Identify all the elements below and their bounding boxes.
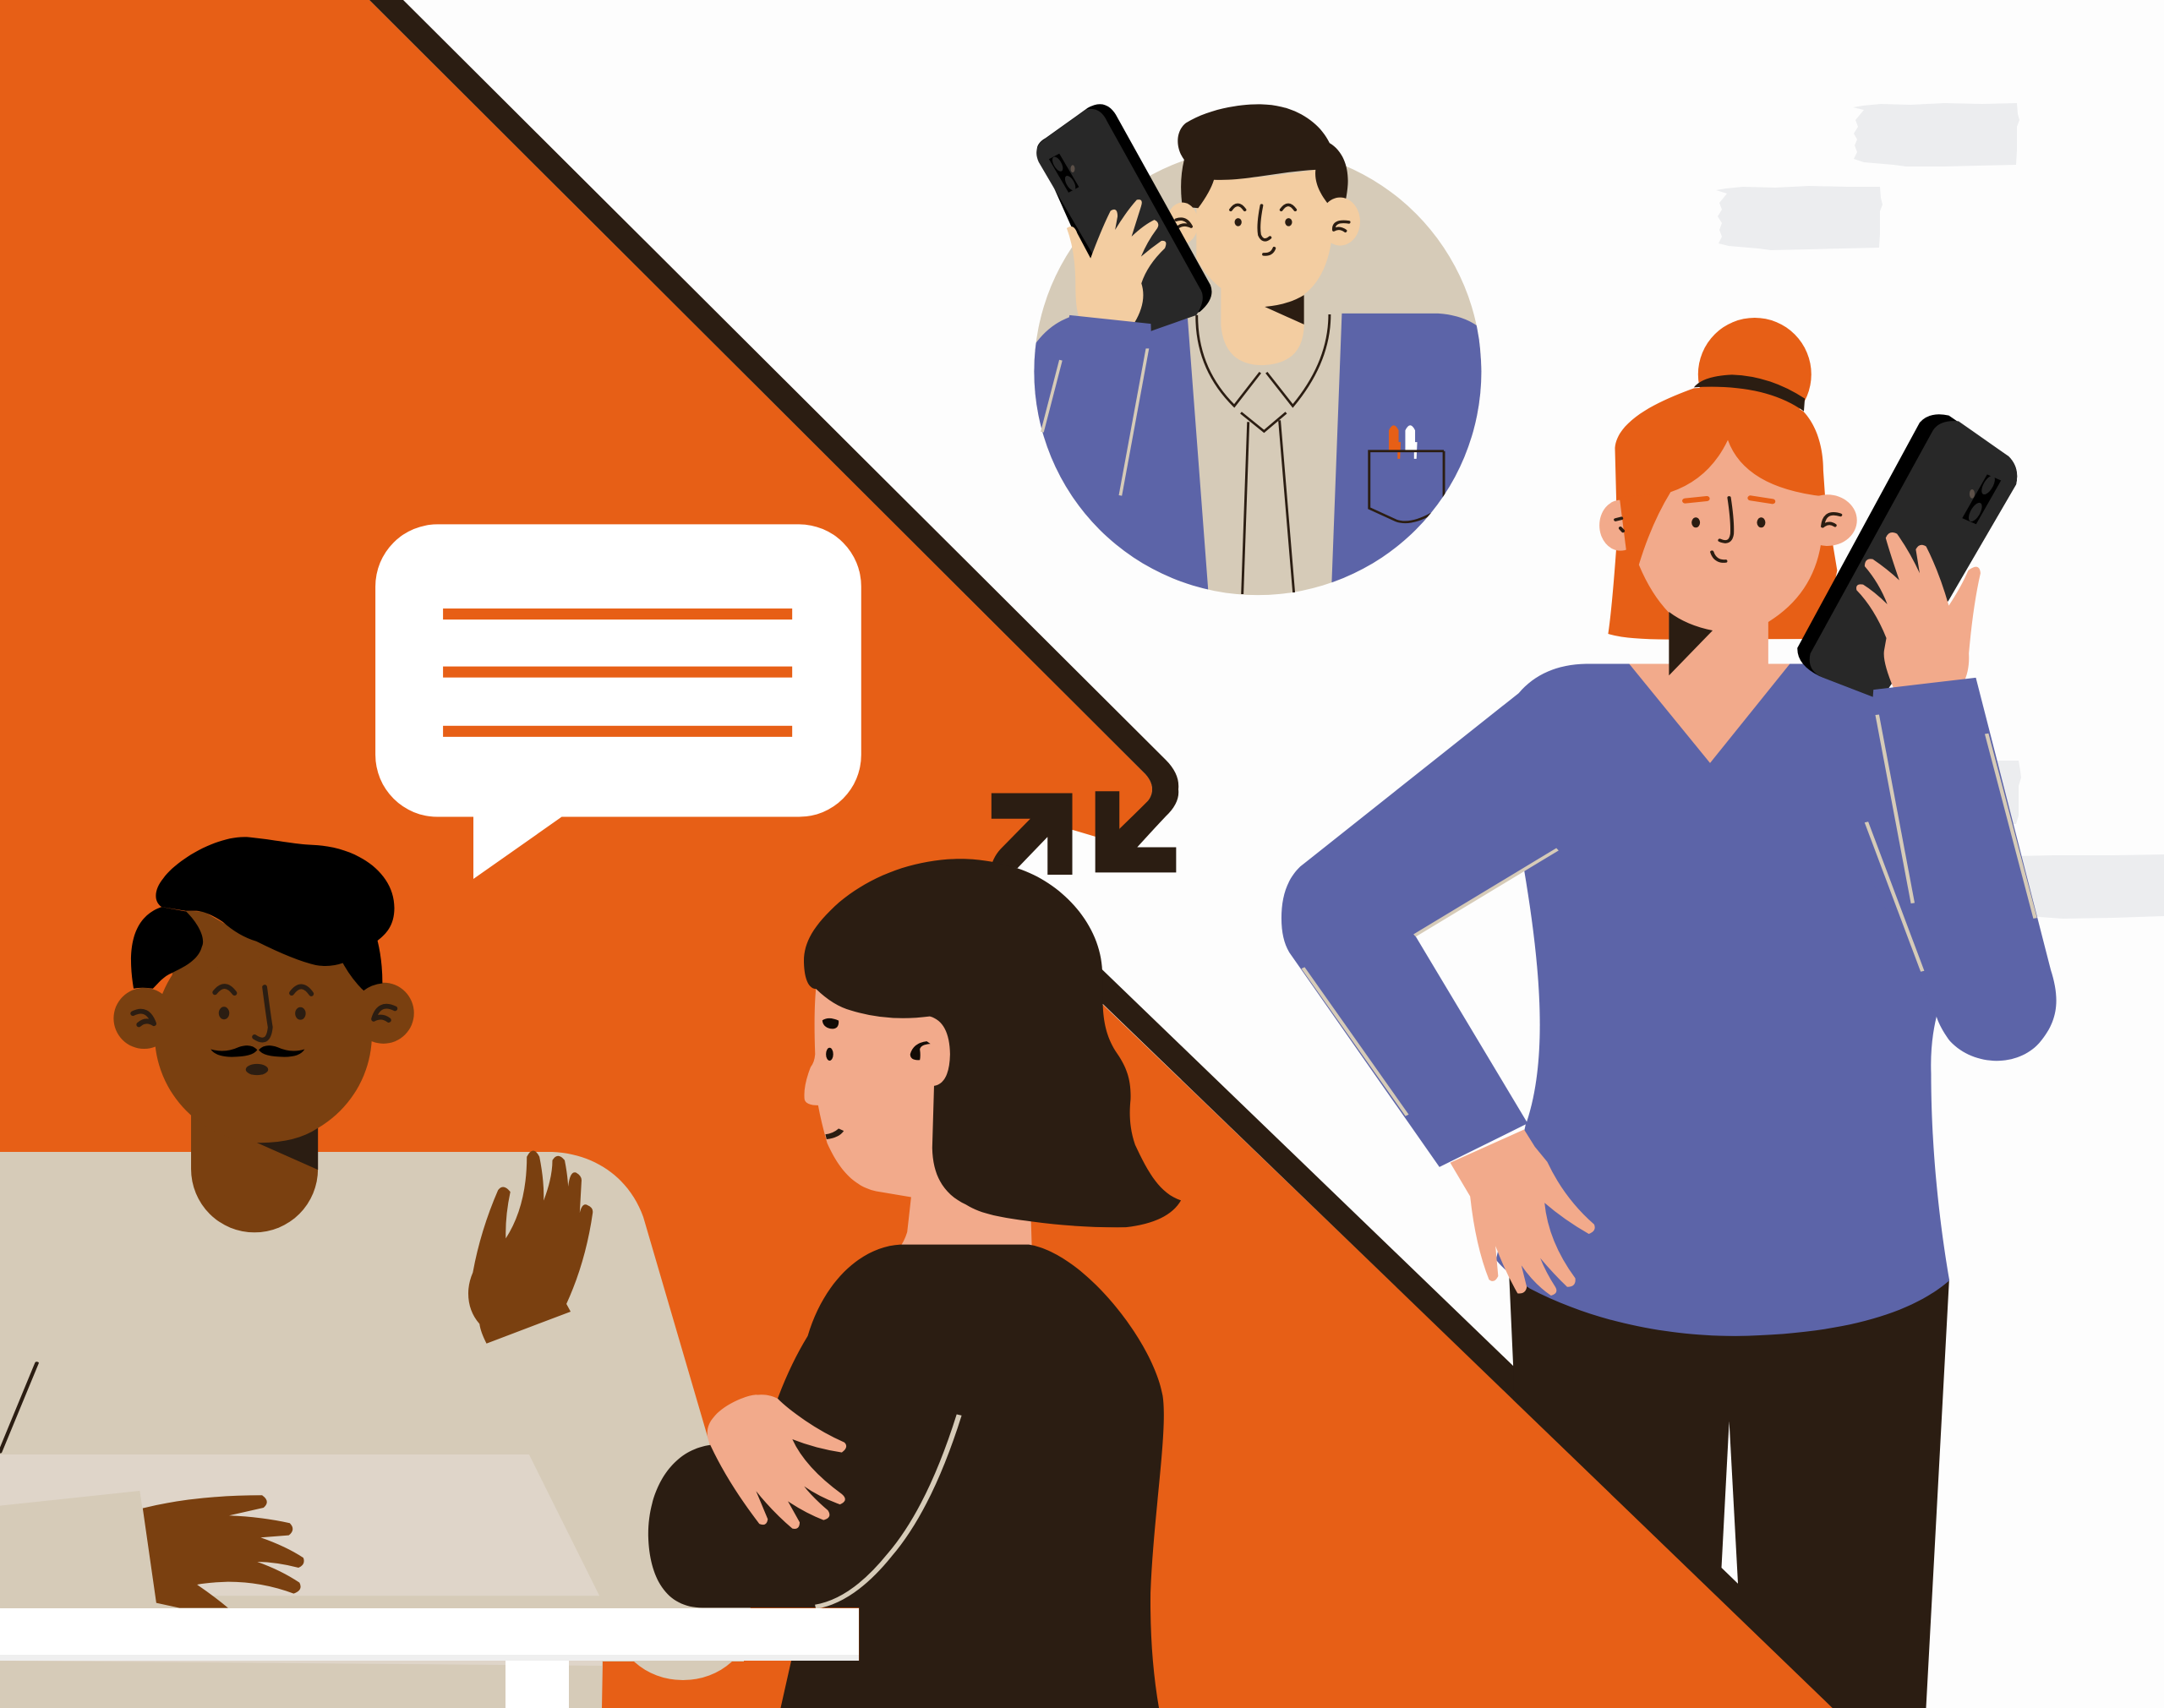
man's hand on desk — [143, 1495, 304, 1608]
her neck and shadow — [1629, 612, 1790, 763]
neck shadow — [1265, 295, 1304, 325]
man's hand on phone — [1067, 199, 1166, 324]
pocket — [1369, 451, 1444, 522]
ears — [1167, 198, 1360, 246]
her raised sleeve and fold lines — [1303, 678, 2057, 1296]
her dark trousers — [1509, 1278, 1949, 1708]
blue jacket — [1034, 313, 1481, 590]
white table — [0, 1608, 859, 1708]
woman's hand — [708, 1394, 846, 1529]
person: man with moustache — [0, 837, 751, 1708]
divider stripe upper — [369, 0, 1178, 847]
facial features — [1176, 205, 1349, 254]
phone — [1036, 104, 1211, 331]
raised cuff — [1063, 315, 1151, 348]
person: woman with dark hair — [648, 859, 1181, 1708]
her head — [1599, 318, 1857, 665]
man's head — [113, 837, 593, 1344]
diagonal divider with arrows — [369, 0, 1944, 1708]
woman's body — [648, 1245, 1164, 1708]
divider stripe lower — [1086, 954, 1944, 1708]
her blue sweater — [1281, 664, 1969, 1336]
woman's head and neck — [804, 859, 1181, 1248]
man's raised hand — [468, 1150, 593, 1344]
face — [1196, 170, 1333, 307]
hair — [1178, 104, 1348, 210]
her phone — [1797, 414, 2017, 697]
her hand — [1856, 532, 1981, 689]
her lower hand — [1451, 1130, 1595, 1296]
collar, tie and pocket lines — [1197, 314, 1330, 594]
pens in pocket — [1389, 425, 1418, 459]
neck — [1221, 285, 1304, 365]
man's elbow below table — [615, 1557, 751, 1680]
circle backdrop — [1034, 148, 1481, 595]
background brush strokes — [1716, 103, 2164, 919]
person: man on phone in circle — [1034, 104, 1481, 595]
desk reflection panel — [0, 1363, 599, 1608]
man's beige shirt — [0, 1152, 744, 1708]
gap between her arm and torso — [1414, 870, 1540, 1121]
speech bubble — [375, 524, 861, 879]
arrows icon — [992, 791, 1176, 875]
person: woman with orange hair — [1281, 318, 2057, 1708]
jacket fold lines — [1042, 345, 1148, 495]
